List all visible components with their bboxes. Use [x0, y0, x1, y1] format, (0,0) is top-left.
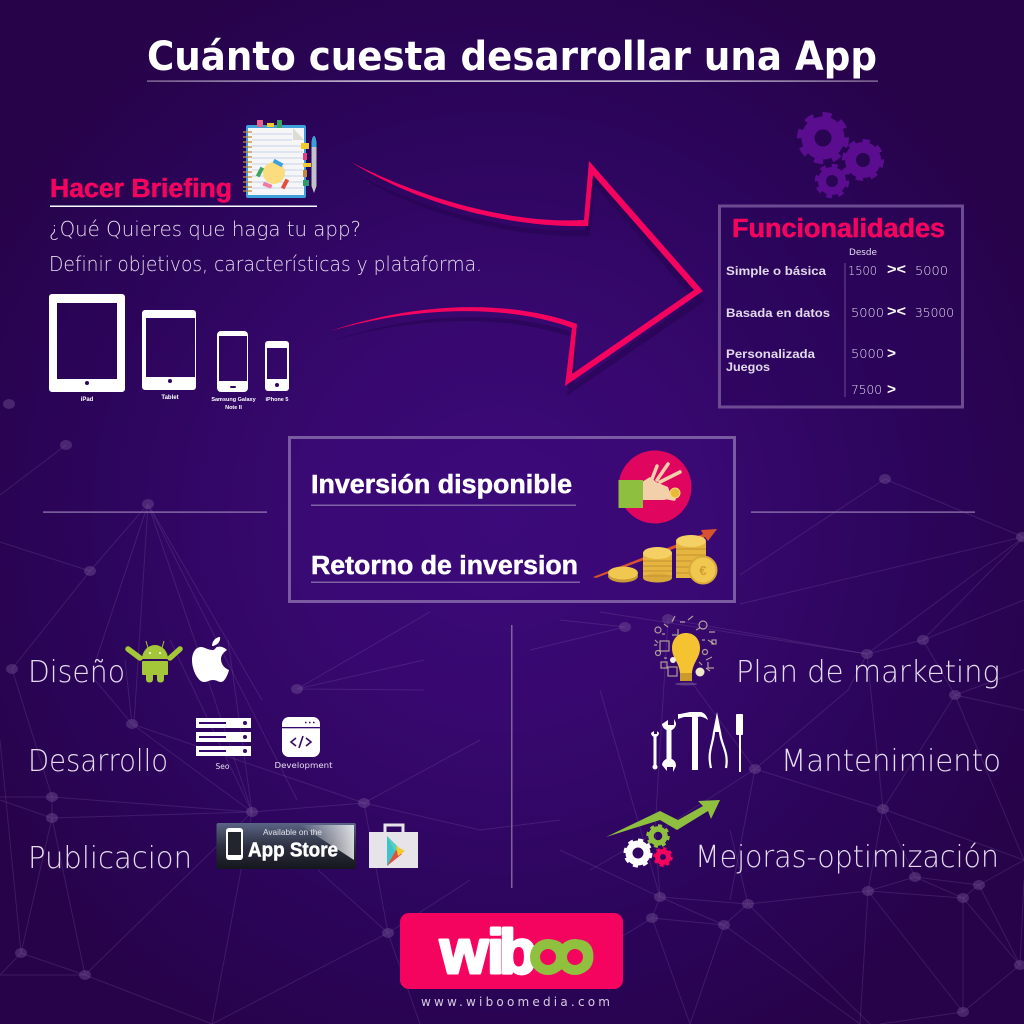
row: Simple o básica: 1500 [848, 263, 877, 278]
heading: Hacer Briefing: Hacer Briefing [50, 175, 232, 203]
text: Plan de marketing: Plan de marketing [736, 655, 1000, 690]
icon: Samsung Galaxy Note II [211, 331, 257, 411]
icon: hand with coin [618, 450, 692, 524]
icon: tablet: Tablet [161, 395, 179, 401]
icon: Samsung Galaxy Note II: Samsung Galaxy [211, 397, 257, 403]
icon: iPhone 5: iPhone 5 [266, 397, 288, 403]
logo: wiboo: wib [439, 918, 537, 987]
row: Simple o básica: >< [887, 261, 906, 278]
text: Mejoras-optimización: Mejoras-optimización [695, 840, 999, 875]
icon: growth arrow with gears [606, 800, 720, 866]
text: Mantenimiento: Mantenimiento [781, 744, 1001, 779]
heading: Funcionalidades: Funcionalidades [732, 215, 945, 243]
panel: inversión [290, 438, 734, 602]
icon: notebook [243, 120, 316, 198]
row: Personalizada: Juegos [726, 360, 770, 374]
text: definition: Definir objetivos, características y plataforma. [49, 252, 482, 276]
logo: wiboo [400, 913, 623, 989]
icon: development window [274, 717, 333, 770]
icon: App Store badge: App Store [248, 840, 338, 862]
row: Personalizada: 5000 [851, 346, 884, 361]
row: Basada en datos: 35000 [915, 305, 954, 320]
icon: lightbulb with doodles [654, 616, 716, 686]
icon: App Store badge: Available on the [263, 828, 323, 837]
row: Basada en datos: 5000 [851, 305, 884, 320]
icon: Samsung Galaxy Note II: Note II [225, 405, 242, 411]
icon: apple [192, 637, 229, 682]
row: Simple o básica: 5000 [915, 263, 948, 278]
row: Personalizada: Personalizada [726, 347, 815, 361]
text: Publicacion: Publicacion [28, 841, 192, 876]
row: Personalizada: > [887, 345, 896, 362]
icon: App Store badge [216, 823, 356, 869]
row: Juegos value [851, 381, 896, 398]
text: website: www.wiboomedia.com [421, 995, 610, 1009]
icon: server (Seo) [196, 718, 251, 771]
center divider [511, 625, 512, 888]
row: Simple o básica [726, 261, 948, 278]
icon: tools [651, 712, 743, 772]
icon: server (Seo): Seo [216, 762, 230, 771]
title: Cuánto cuesta desarrollar una App [147, 34, 877, 80]
row: Juegos value: 7500 [851, 382, 882, 397]
text: question: ¿Qué Quieres que haga tu app? [49, 217, 361, 241]
row: Basada en datos [726, 303, 954, 320]
icon: tablet [142, 310, 196, 401]
arrow [330, 161, 705, 396]
icon: coins [593, 529, 717, 584]
divider left [43, 512, 267, 513]
icon: iPhone 5 [265, 341, 289, 403]
label: Desde: Desde [849, 248, 877, 258]
row: Basada en datos: Basada en datos [726, 306, 830, 320]
icon: coins: € [699, 563, 707, 578]
icon: development window: Development [274, 761, 333, 770]
icon: Play Store bag [369, 825, 418, 868]
text: Inversión disponible: Inversión disponible [311, 471, 572, 499]
icon: android [128, 641, 180, 682]
network pattern [0, 399, 1024, 1024]
logo: wiboo: oo [531, 918, 596, 987]
divider right [751, 512, 975, 513]
row: Juegos value: > [887, 381, 896, 398]
panel: funcionalidades [720, 206, 962, 407]
icon: iPad: iPad [81, 397, 94, 403]
row: Basada en datos: >< [887, 303, 906, 320]
row: Personalizada [726, 345, 896, 374]
icon: purple gears [800, 114, 882, 196]
icon: iPad [49, 294, 125, 403]
text: Retorno de inversion: Retorno de inversion [311, 552, 578, 580]
text: Diseño: Diseño [28, 655, 125, 690]
text: Desarrollo: Desarrollo [28, 744, 168, 779]
panel: briefing [49, 120, 482, 411]
row: Simple o básica: Simple o básica [726, 264, 826, 278]
